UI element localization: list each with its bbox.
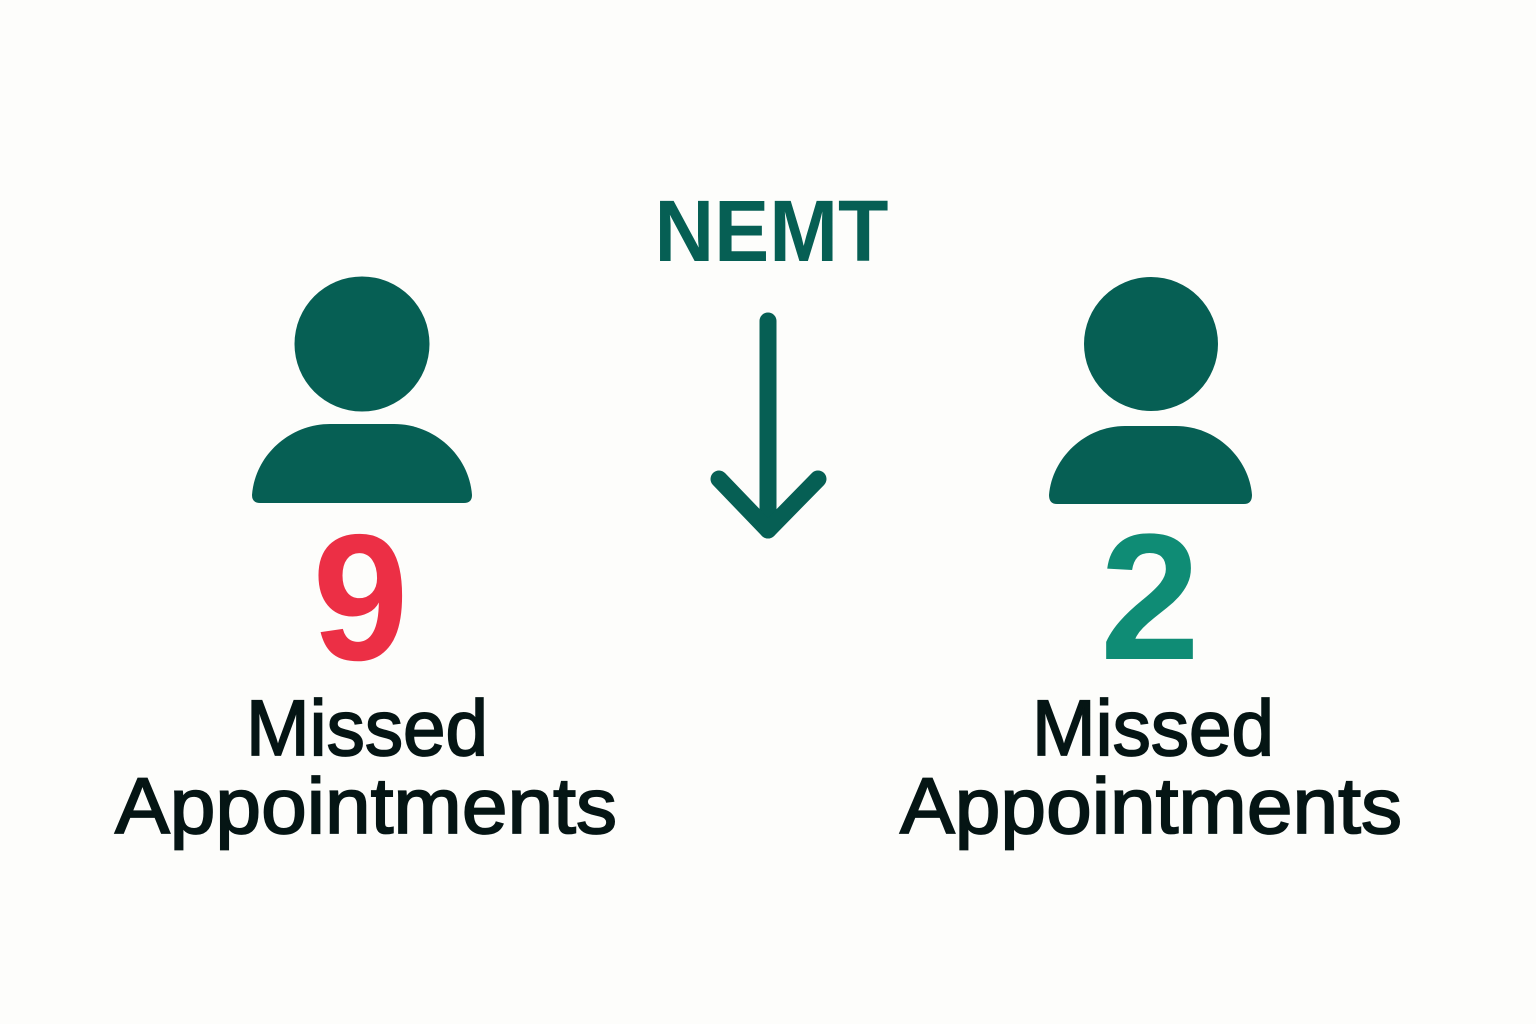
label: missed appointments after: Missed — [1032, 683, 1274, 772]
panel: after NEMT — [900, 277, 1402, 850]
label: missed appointments before: Appointments — [115, 761, 617, 850]
number: 9: 9 — [312, 498, 408, 698]
heading: NEMT: NEMT — [654, 183, 888, 280]
arrow: down — [719, 321, 818, 530]
icon: person after — [1049, 277, 1252, 504]
label: missed appointments after: Appointments — [900, 761, 1402, 850]
label: missed appointments before: Missed — [246, 683, 488, 772]
icon: person before — [252, 276, 472, 503]
panel: before NEMT — [115, 276, 617, 850]
label: missed appointments after — [900, 683, 1402, 850]
number: 2: 2 — [1100, 497, 1200, 698]
label: missed appointments before — [115, 683, 617, 850]
